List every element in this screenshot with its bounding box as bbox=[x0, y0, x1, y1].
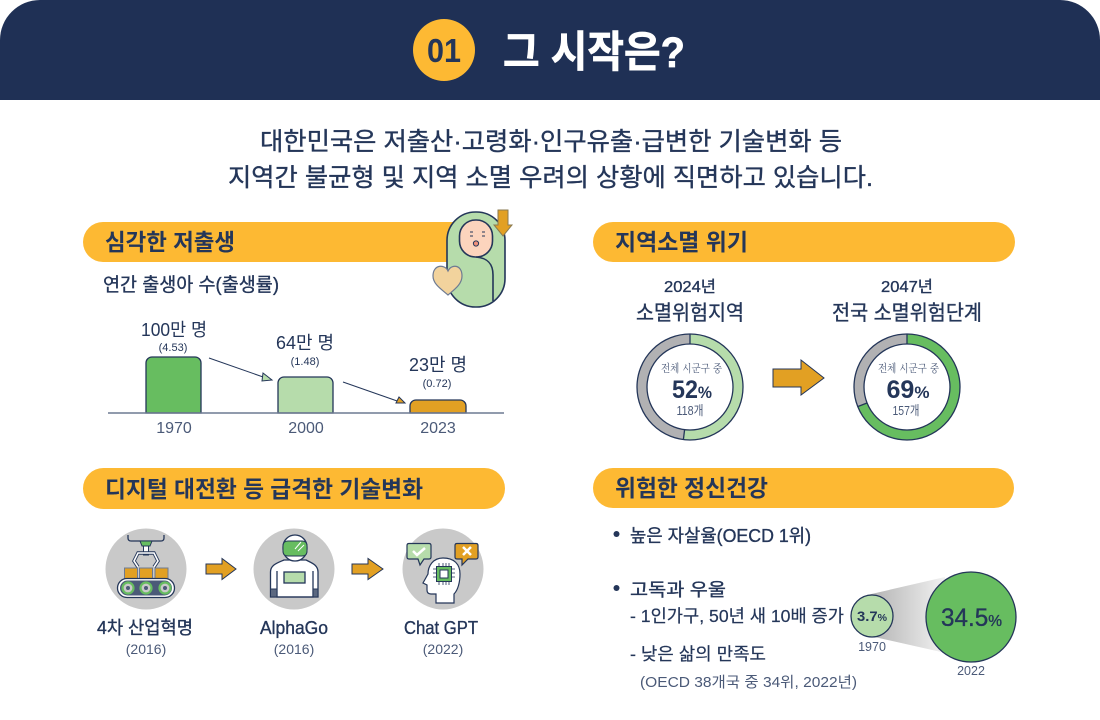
label: AlphaGo: AlphaGo bbox=[260, 618, 328, 638]
arrow bbox=[352, 558, 383, 580]
label 2024: 2024년 bbox=[664, 278, 716, 296]
label: AlphaGo: (2016) bbox=[274, 641, 314, 657]
bullet list: loneliness and depression: - 낮은 삶의 만족도 bbox=[630, 644, 766, 664]
arrow bbox=[206, 558, 236, 580]
label 2024 bbox=[636, 278, 744, 325]
donut 2047: 69%: 69% bbox=[886, 376, 930, 404]
label 2047 bbox=[832, 278, 982, 325]
bar 2000: 2000 bbox=[288, 420, 324, 437]
bullet list: loneliness and depression bbox=[614, 580, 857, 691]
label: AlphaGo bbox=[260, 618, 328, 657]
bar 2023: 23만 명 bbox=[409, 355, 467, 375]
heading pill bbox=[83, 222, 505, 262]
label 2024: 소멸위험지역 bbox=[636, 302, 744, 325]
heading pill bbox=[593, 468, 1014, 508]
label: 4th industrial revolution: (2016) bbox=[126, 641, 166, 657]
bullet list: loneliness and depression: - 1인가구, 50년 새 10배 증가 bbox=[630, 606, 844, 626]
heading pill: 지역소멸 위기 bbox=[615, 229, 748, 255]
donut 2024: 52%: 118개 bbox=[676, 403, 704, 418]
bar 1970: 100만 명 bbox=[141, 320, 207, 340]
panel: regional extinction crisis bbox=[593, 222, 1015, 440]
section number badge: 01 bbox=[427, 32, 461, 69]
bar 2023: (0.72) bbox=[423, 378, 451, 390]
donut 2024: 52% bbox=[637, 334, 743, 440]
donut 2024: 52%: 52% bbox=[672, 376, 712, 404]
intro text: 지역간 불균형 및 지역 소멸 우려의 상황에 직면하고 있습니다. bbox=[228, 164, 873, 192]
bubble 1970 bbox=[851, 595, 893, 654]
donut 2047: 69%: 157개 bbox=[892, 403, 920, 418]
bar 1970: 1970 bbox=[156, 420, 192, 437]
title: 그 시작은? bbox=[503, 29, 685, 77]
heading pill: 디지털 대전환 등 급격한 기술변화 bbox=[105, 476, 423, 502]
bullet: high suicide rate: 높은 자살율(OECD 1위) bbox=[630, 526, 811, 546]
icon: AI head with chat bubbles bbox=[402, 528, 484, 610]
bullet list: loneliness and depression: (OECD 38개국 중 34위, 2022년) bbox=[640, 674, 857, 691]
heading pill: 위험한 정신건강 bbox=[615, 475, 768, 501]
intro text bbox=[228, 128, 873, 192]
donut 2047: 69%: 전체 시군구 중 bbox=[878, 360, 939, 376]
label 2047: 전국 소멸위험단계 bbox=[832, 302, 982, 325]
bubble 2022 bbox=[926, 572, 1016, 678]
chart subtitle: 연간 출생아 수(출생률) bbox=[103, 274, 279, 296]
heading pill bbox=[83, 468, 505, 509]
bullet list: loneliness and depression: 고독과 우울 bbox=[630, 580, 726, 600]
bar 2000 bbox=[276, 333, 334, 437]
bar 2000: 64만 명 bbox=[276, 333, 334, 353]
arrow: 2000 to 2023 bbox=[343, 382, 405, 403]
bar chart: annual births bbox=[108, 320, 504, 437]
panel: rapid technological change bbox=[83, 468, 505, 657]
panel: mental health at risk bbox=[593, 468, 1016, 691]
label 2047: 2047년 bbox=[881, 278, 933, 296]
icon: factory conveyor robot bbox=[106, 528, 186, 610]
bar 2023: 2023 bbox=[420, 420, 456, 437]
bubble 1970: 1970 bbox=[858, 640, 886, 654]
label: Chat GPT: Chat GPT bbox=[404, 618, 478, 638]
bar 1970 bbox=[141, 320, 207, 437]
arrow: 1970 to 2000 bbox=[209, 358, 272, 381]
bubble comparison chart bbox=[851, 572, 1016, 678]
bubble 2022: 2022 bbox=[957, 664, 985, 678]
donut 2047: 69% bbox=[854, 334, 960, 440]
label: Chat GPT bbox=[404, 618, 478, 657]
bar 2023 bbox=[409, 355, 467, 437]
bar 1970: (4.53) bbox=[159, 342, 187, 354]
panel: low birth rate bbox=[83, 210, 512, 437]
heading pill: 심각한 저출생 bbox=[105, 229, 235, 255]
bubble 2022: 34.5% bbox=[941, 604, 1002, 632]
label: 4th industrial revolution: 4차 산업혁명 bbox=[97, 618, 193, 638]
bar 2000: (1.48) bbox=[291, 356, 319, 368]
intro text: 대한민국은 저출산·고령화·인구유출·급변한 기술변화 등 bbox=[260, 128, 842, 156]
label: Chat GPT: (2022) bbox=[423, 641, 463, 657]
label: 4th industrial revolution bbox=[97, 618, 193, 657]
arrow: 2024 to 2047 bbox=[773, 360, 824, 395]
icon: swaddled baby bbox=[433, 210, 512, 307]
section number badge bbox=[413, 19, 475, 81]
header band bbox=[0, 0, 1100, 100]
heading pill bbox=[593, 222, 1015, 262]
bubble 1970: 3.7% bbox=[857, 608, 887, 624]
icon: AlphaGo robot bbox=[254, 528, 334, 610]
donut 2024: 52%: 전체 시군구 중 bbox=[661, 360, 722, 376]
